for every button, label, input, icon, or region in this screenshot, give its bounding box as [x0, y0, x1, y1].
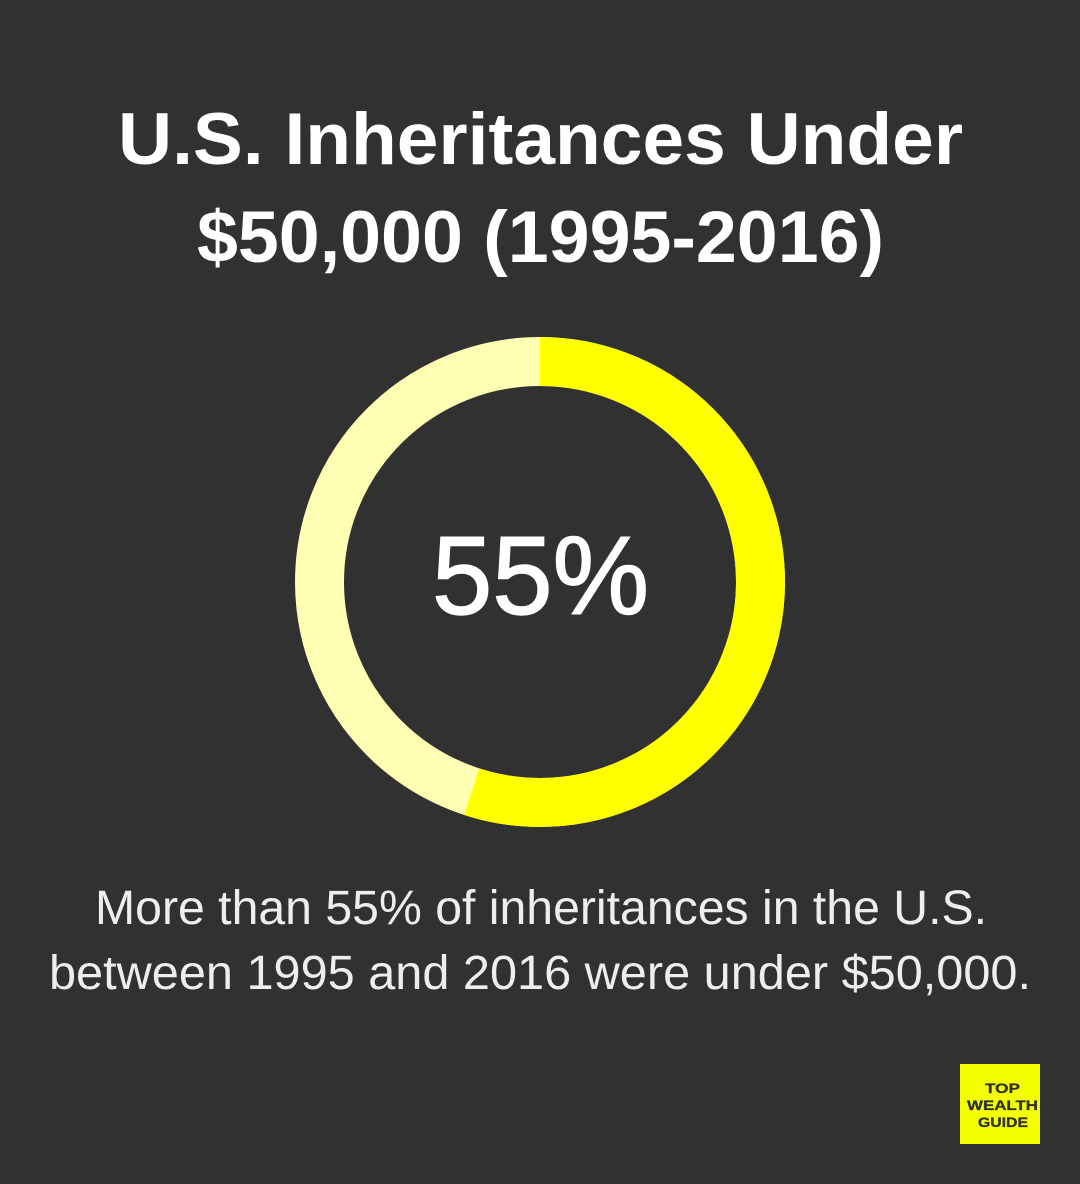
donut 55% segment: [320, 362, 760, 802]
donut chart: 55%: [320, 362, 760, 802]
logo badge: [960, 1064, 1040, 1144]
logo badge: WEALTH: [967, 1098, 1038, 1113]
title: U.S. Inheritances Under: [118, 99, 963, 180]
donut remainder segment: [320, 362, 760, 802]
title: [118, 99, 963, 278]
logo badge: TOP: [985, 1081, 1020, 1096]
logo badge: GUIDE: [978, 1115, 1028, 1130]
center value: 55%: [432, 514, 649, 638]
description text: between 1995 and 2016 were under $50,000.: [49, 947, 1031, 1000]
description text: More than 55% of inheritances in the U.S.: [95, 882, 987, 935]
description text: [49, 882, 1031, 1000]
title: $50,000 (1995-2016): [197, 197, 884, 278]
